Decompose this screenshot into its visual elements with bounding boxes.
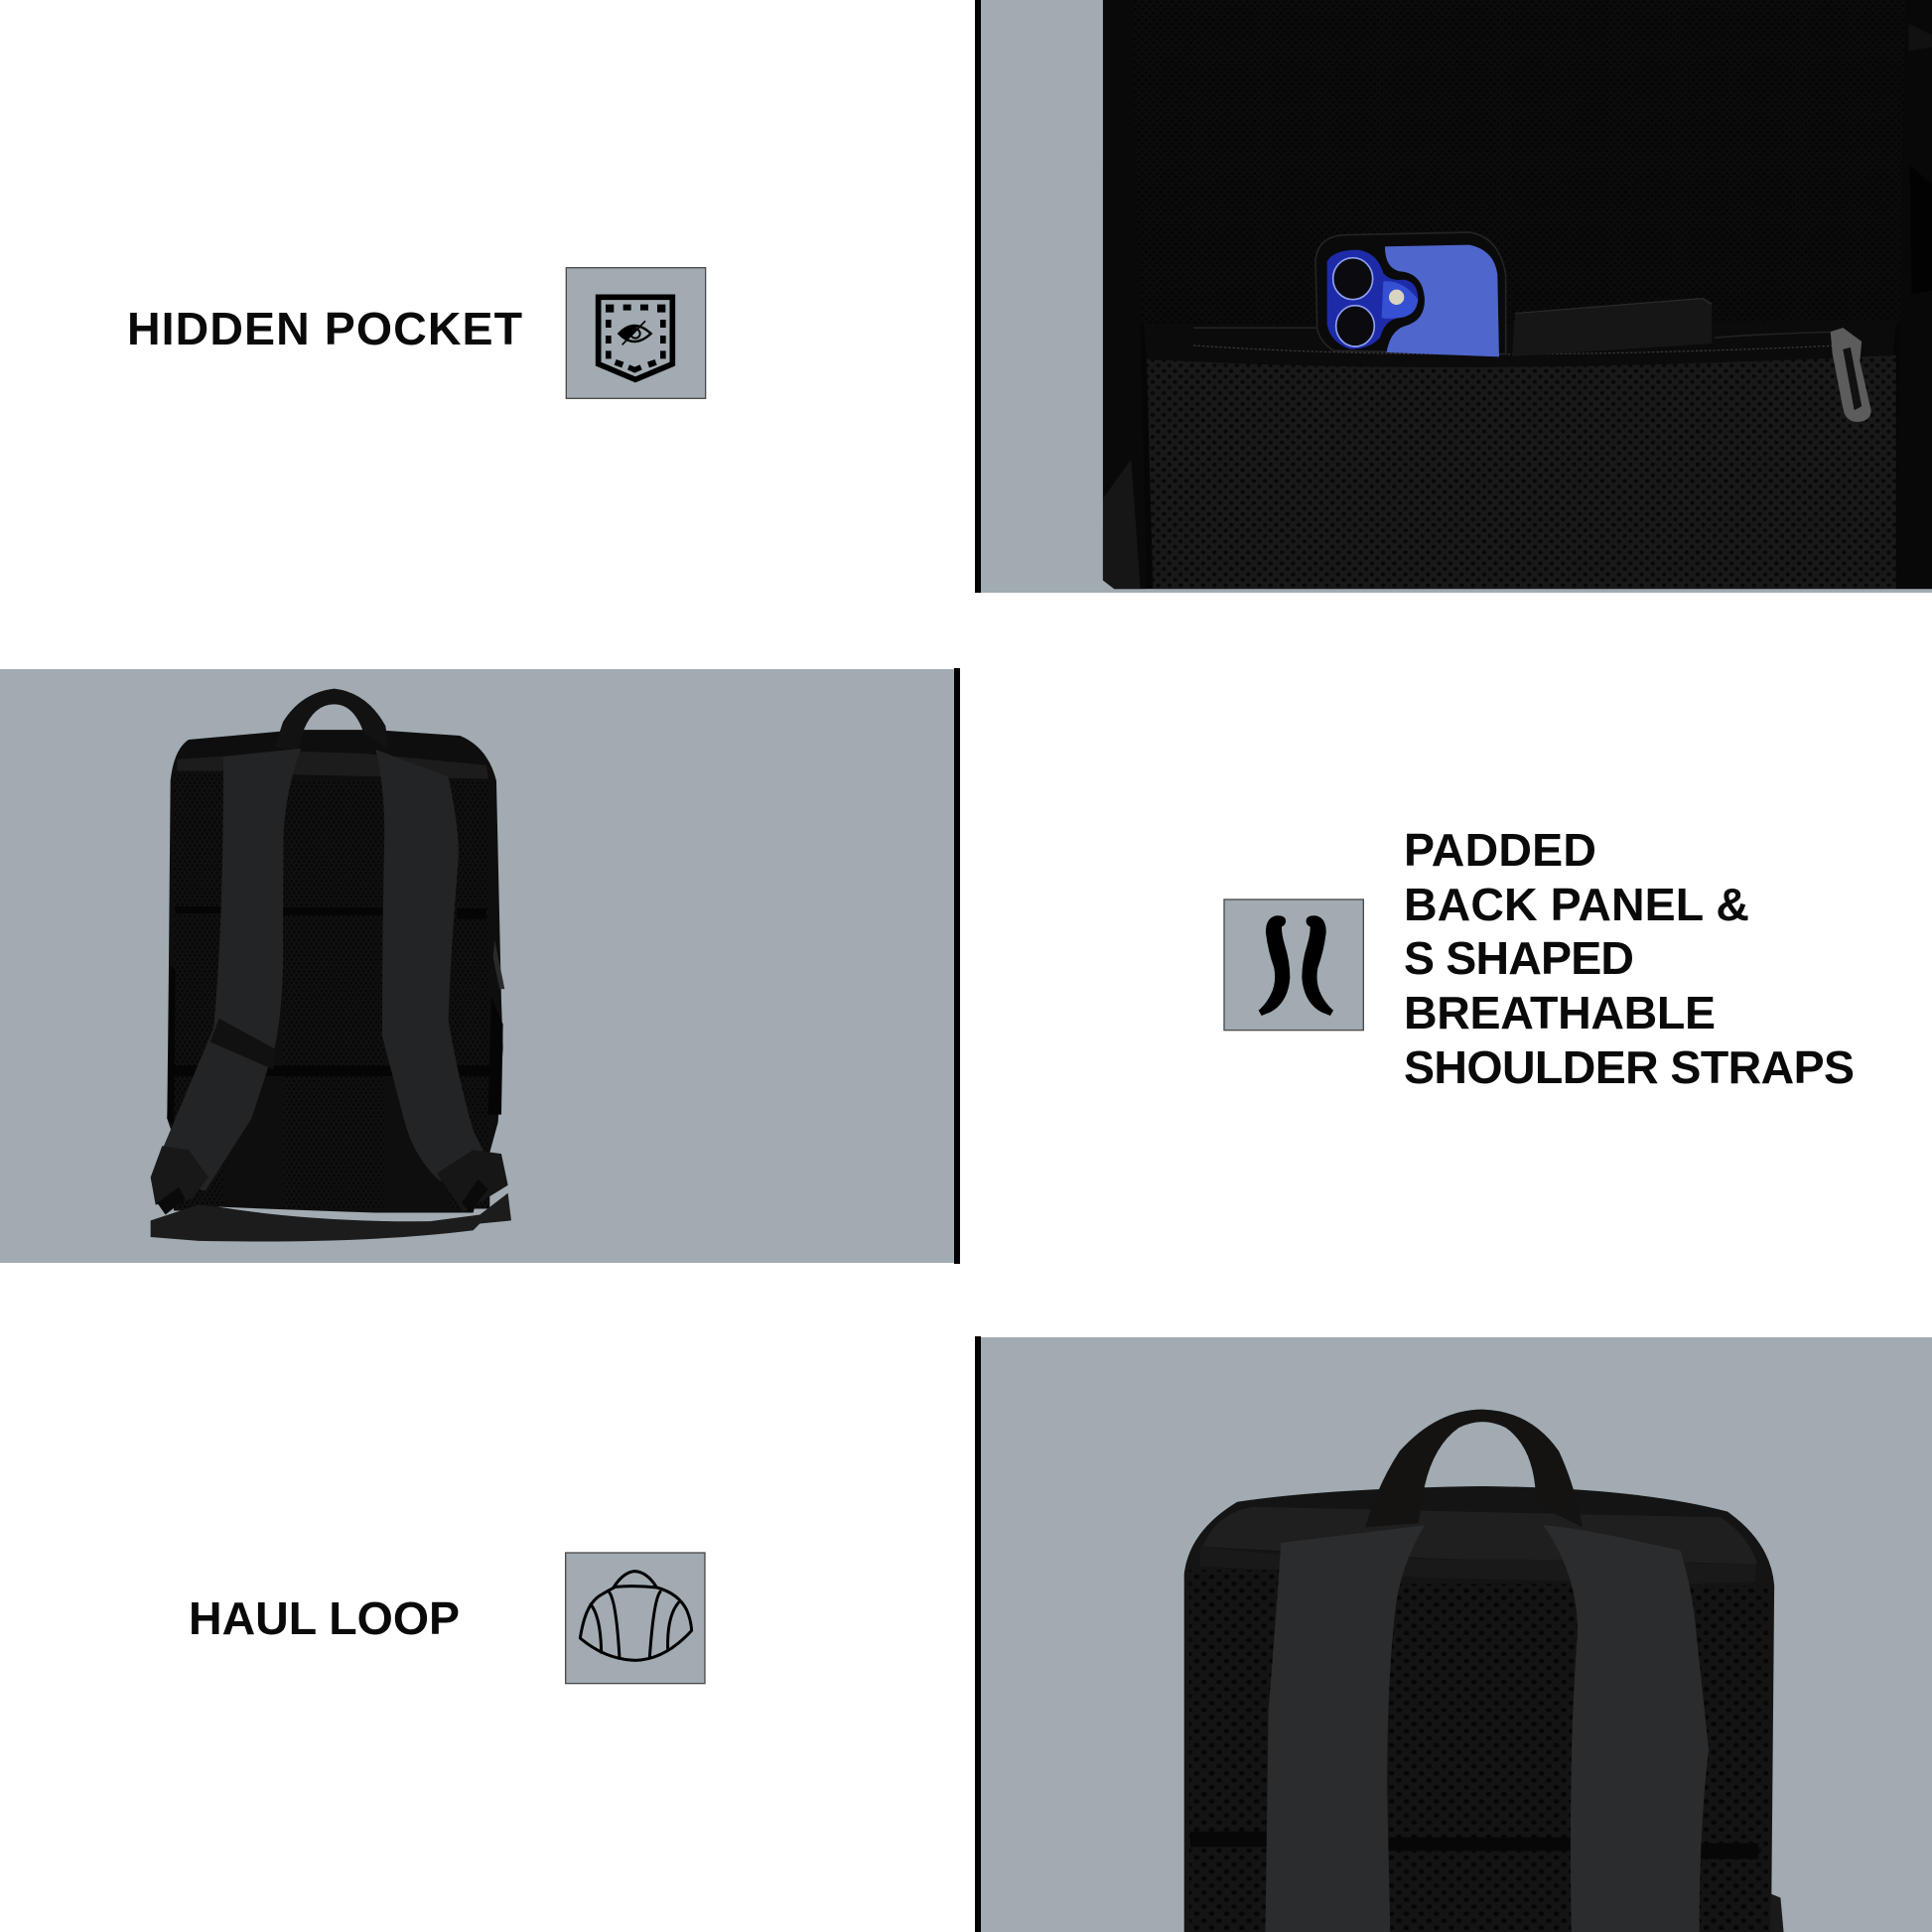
right shoulder strap	[1543, 1525, 1709, 1932]
text block: padded back panel and straps: BREATHABLE	[1404, 987, 1716, 1038]
panel: padded back panel photo	[0, 668, 960, 1264]
zipper pull	[1831, 328, 1871, 422]
photo: back of backpack with pocket	[1103, 0, 1932, 589]
accent bar	[954, 668, 960, 1264]
icon: s shaped straps	[1224, 899, 1363, 1031]
text block: padded back panel and straps: PADDED	[1404, 824, 1596, 876]
text block: padded back panel and straps	[1404, 824, 1855, 1093]
accent bar	[975, 0, 981, 593]
carry handle	[1365, 1410, 1583, 1527]
text block: padded back panel and straps: S SHAPED	[1404, 932, 1634, 984]
photo: full backpack rear view	[151, 689, 511, 1242]
phone in pocket	[1315, 232, 1506, 356]
left shoulder strap	[1265, 1525, 1425, 1932]
left shoulder strap	[151, 749, 301, 1214]
text block: padded back panel and straps: SHOULDER STRAPS	[1404, 1041, 1855, 1093]
lower webbing strap	[151, 1193, 511, 1242]
card in pocket	[1512, 299, 1712, 356]
carry handle	[275, 689, 389, 750]
grey photo backdrop	[0, 669, 954, 1263]
gap under bag	[216, 1207, 430, 1221]
heading: hidden pocket: HIDDEN POCKET	[127, 303, 522, 354]
icon: hidden pocket	[566, 268, 706, 398]
accent bar	[975, 1336, 981, 1932]
grey photo backdrop	[981, 1337, 1932, 1932]
side zippers	[493, 940, 504, 989]
side zipper	[1770, 1894, 1784, 1932]
grey photo backdrop	[981, 0, 1932, 593]
icon: haul loop	[566, 1553, 705, 1684]
side zipper	[1910, 165, 1932, 295]
heading: haul loop: HAUL LOOP	[189, 1592, 460, 1644]
panel: hidden pocket photo	[975, 0, 1932, 593]
text block: padded back panel and straps: BACK PANEL &	[1404, 879, 1749, 930]
right shoulder strap	[375, 750, 508, 1212]
photo: top of backpack with handle	[1184, 1410, 1784, 1932]
panel: haul loop photo	[975, 1336, 1932, 1932]
